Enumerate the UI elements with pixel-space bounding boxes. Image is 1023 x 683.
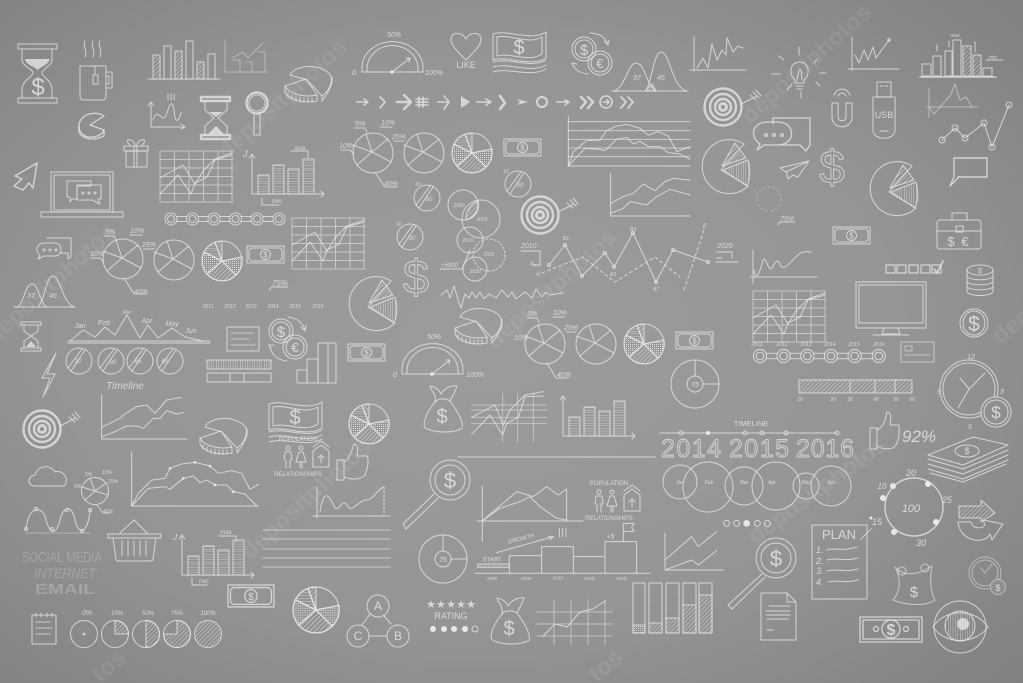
icon: speech bubbles xyxy=(753,118,810,151)
month circles xyxy=(663,462,851,512)
ruled lines xyxy=(263,530,390,567)
icon: banknote xyxy=(676,332,713,349)
icon: coin stack xyxy=(967,265,993,296)
pie big xyxy=(349,277,397,331)
icon: open money bag xyxy=(893,564,935,605)
watermark: depositphotos xyxy=(736,0,877,129)
year labels: 2013 xyxy=(244,304,257,310)
ring with values: 30 xyxy=(916,538,926,548)
growth steps: 2020 xyxy=(583,576,595,581)
icon: briefcase xyxy=(937,213,981,249)
icon: money bag xyxy=(424,386,462,432)
icon: light bulb xyxy=(772,47,826,98)
year labels: 2014 xyxy=(266,304,279,310)
donut chart xyxy=(671,360,719,408)
icon: timeline chain: 2013 xyxy=(799,342,812,348)
pie chart with labels: 25% xyxy=(141,242,156,249)
icon: dollar hourglass xyxy=(18,44,57,103)
month circles: May xyxy=(801,480,811,486)
wave chart xyxy=(750,250,817,283)
pie chart with labels: 25% xyxy=(391,134,406,141)
mini line chart xyxy=(690,37,746,71)
growth steps: GROWTH xyxy=(507,533,536,546)
icon: thumbs up xyxy=(337,444,368,480)
timeline label: Timeline xyxy=(106,381,144,392)
gauge xyxy=(393,334,484,379)
icon: monitor xyxy=(856,282,926,335)
gauge: 0 xyxy=(393,372,397,379)
pie chart with labels: 10% xyxy=(381,120,395,127)
bar chart with max and min: max xyxy=(220,530,233,536)
icon: like heart xyxy=(451,33,481,70)
gauge: 50% xyxy=(387,32,401,39)
progress bar xyxy=(797,380,915,403)
month circles: Mar xyxy=(740,480,749,486)
circles with values: 65 xyxy=(135,359,142,365)
small pie xyxy=(503,169,531,197)
arrows row xyxy=(357,95,633,109)
icon: gift xyxy=(124,140,148,167)
year labels: 2012 xyxy=(223,304,236,310)
pie chart with labels: 25% xyxy=(563,325,578,332)
icon: cloud xyxy=(29,467,66,486)
population pictogram xyxy=(274,437,329,478)
icon: coins exchange xyxy=(572,33,612,75)
area line chart xyxy=(132,452,258,506)
small pie chart: 40% xyxy=(103,509,114,515)
plan note: 2. xyxy=(815,556,824,566)
small pie chart: 25% xyxy=(107,479,119,485)
icon: dollar hourglass: $ xyxy=(31,74,45,101)
circles with values: 65 xyxy=(162,359,169,365)
outlined years: 2015 xyxy=(729,435,789,463)
icon: magnifier xyxy=(246,92,268,135)
stepped bars with arrows xyxy=(920,33,1003,77)
small pie: 10 xyxy=(415,182,421,188)
icon: 3d pie xyxy=(455,308,502,344)
faint social media text: INTERNET xyxy=(34,565,97,581)
gauge: 50% xyxy=(427,334,441,341)
pie chart with labels xyxy=(514,310,578,379)
venn diagram: 2005 xyxy=(475,217,488,223)
pie chart with labels: 10% xyxy=(130,228,144,235)
icon: banknote: $ xyxy=(887,622,896,639)
zigzag chart: B1 xyxy=(563,236,569,242)
icon: banknote xyxy=(833,227,870,244)
icon: clock with coin: $ xyxy=(991,403,1001,422)
icon: magnifier with dollar xyxy=(403,460,470,529)
line chart xyxy=(477,487,583,542)
icon: thumbs up xyxy=(870,412,899,449)
plan note: PLAN xyxy=(822,527,856,542)
month circles: Apr xyxy=(767,480,776,486)
venn diagram: +5000 xyxy=(441,263,459,269)
line chart on grid xyxy=(160,151,233,202)
line chart on grid xyxy=(753,291,826,342)
bar chart with max and min: min xyxy=(199,579,209,585)
growth steps: START xyxy=(483,558,502,564)
icon: timeline chain: 2015 xyxy=(847,342,860,348)
outlined years xyxy=(661,435,854,463)
icon: lightning xyxy=(42,353,56,397)
icon: like heart: LIKE xyxy=(456,60,476,70)
icon: target xyxy=(522,196,578,234)
stepped bars with arrows: max xyxy=(950,33,960,39)
timeline rule xyxy=(458,431,839,457)
mountain month chart: Apr xyxy=(141,318,153,325)
pie chart with labels: 5% xyxy=(527,311,537,318)
zigzag chart: F xyxy=(703,224,707,230)
zigzag chart: 2010 xyxy=(520,243,537,250)
curve chart xyxy=(148,94,185,129)
icon: document xyxy=(761,593,796,640)
hatched pie chart xyxy=(202,241,242,281)
icon: coins exchange xyxy=(269,317,307,361)
bell curve chart: 37 xyxy=(633,75,642,82)
icon: money bag xyxy=(491,598,529,644)
zigzag chart xyxy=(520,224,738,293)
icon: clock with coin: 3 xyxy=(1000,389,1004,396)
icon: magnifier with dollar xyxy=(728,538,796,609)
hatched pie chart xyxy=(349,404,389,444)
ABC cycle: C xyxy=(354,629,363,643)
pie chart with labels: 10% xyxy=(339,143,353,150)
timeline heading: TIMELINE xyxy=(734,419,768,428)
icon: coins exchange: € xyxy=(596,56,604,71)
icon: small hourglass xyxy=(21,322,41,351)
pie chart with labels: 5% xyxy=(105,229,115,236)
population pictogram xyxy=(585,481,640,522)
icon: dollar sign: $ xyxy=(819,141,845,193)
percentage circles: 100% xyxy=(200,611,216,617)
pie chart with labels: 40% xyxy=(384,181,398,188)
icon: briefcase: $ xyxy=(947,234,955,249)
zigzag chart: B4 xyxy=(630,227,636,233)
icon: banknote xyxy=(860,617,922,642)
growth steps: 2030 xyxy=(615,576,627,581)
zigzag chart: A xyxy=(535,272,540,278)
ring with values: 100 xyxy=(902,503,921,515)
venn diagram: 2000 xyxy=(452,203,465,209)
hatched pie chart xyxy=(452,133,492,173)
checkboxes xyxy=(886,261,943,273)
outlined years: 2014 xyxy=(661,435,721,463)
watermark: depositphotos xyxy=(743,431,892,550)
icon: banknote xyxy=(348,344,385,361)
wave chart xyxy=(24,508,92,533)
icon: dollar coin xyxy=(960,309,988,337)
line chart xyxy=(568,117,690,166)
bar chart with max and min: min xyxy=(272,199,282,205)
icon: arrow recycling xyxy=(958,500,1003,540)
pie chart with labels: 10% xyxy=(514,335,528,342)
bar chart with max and min: J xyxy=(242,149,248,159)
icon: pacman pie xyxy=(79,113,104,139)
percentage circles: 15% xyxy=(111,611,124,617)
icon: USB drive xyxy=(873,82,895,138)
icon: card note xyxy=(227,327,259,351)
faint social media text: EMAIL xyxy=(35,581,95,598)
line chart on grid xyxy=(537,600,612,645)
bar chart with max and min: J xyxy=(172,533,178,542)
pie big xyxy=(702,140,750,194)
circles with values: 10 xyxy=(75,359,82,365)
icon: target xyxy=(24,410,80,448)
icon: banknote xyxy=(504,139,541,156)
small pie: 10 xyxy=(503,169,509,175)
venn diagram: 2020 xyxy=(468,269,481,275)
line chart xyxy=(611,173,690,216)
rising trend chart xyxy=(665,520,770,570)
gauge: 0 xyxy=(352,70,356,77)
ABC cycle: A xyxy=(374,599,382,613)
ABC cycle xyxy=(347,595,409,647)
year labels: 2015 xyxy=(288,304,301,310)
icon: cursor xyxy=(14,163,37,190)
bell curve chart: 46 xyxy=(49,293,57,300)
icon: clock with coin xyxy=(937,354,1011,431)
icon: clock with coin: 12 xyxy=(967,354,975,361)
percentage: 92% xyxy=(902,427,936,446)
watermark: depositphotos xyxy=(236,434,377,564)
pie chart with labels: 10% xyxy=(90,251,104,258)
gauge: 100% xyxy=(466,372,484,379)
bell curve chart: 37 xyxy=(27,293,36,300)
faint dashed circle xyxy=(757,187,781,211)
small pie xyxy=(396,222,423,250)
icon: magnet xyxy=(832,89,852,127)
ring with values xyxy=(861,468,953,548)
pie chart with labels: 40% xyxy=(134,289,148,296)
growth steps xyxy=(475,523,650,581)
small pie xyxy=(414,182,440,211)
line chart on grid xyxy=(472,392,547,442)
pie big xyxy=(870,162,918,216)
percentage circles: 0% xyxy=(82,610,92,617)
icon: timeline chain: 2016 xyxy=(872,342,885,348)
percentage label: 75% xyxy=(272,279,288,288)
bar chart with max and min xyxy=(242,146,324,205)
rating xyxy=(426,599,478,632)
small pie: 90 xyxy=(409,236,416,242)
ABC cycle: B xyxy=(394,629,402,643)
icon: 3d pie xyxy=(285,66,332,102)
circles with values xyxy=(66,348,183,374)
icon: eye xyxy=(933,601,988,653)
icon: clipboard xyxy=(32,613,56,644)
pulse chart xyxy=(441,286,563,308)
mountain month chart: Mar xyxy=(123,310,132,316)
mountain month chart: May xyxy=(165,321,179,328)
icon: cash stack xyxy=(928,437,1008,482)
zigzag chart: B3 xyxy=(610,272,616,278)
venn diagram: 2010 xyxy=(461,238,474,244)
faint social media text: SOCIAL MEDIA xyxy=(22,549,102,566)
icon: clock with coin: 6 xyxy=(968,424,972,431)
zigzag chart: 2020 xyxy=(716,243,733,250)
hatched pie chart xyxy=(293,587,339,633)
icon: dollar coin: $ xyxy=(968,313,980,336)
progress bar: 10 xyxy=(797,397,803,403)
plan note: 3. xyxy=(816,566,824,576)
year labels: 2016 xyxy=(311,304,324,310)
icon: coins exchange: $ xyxy=(580,42,589,59)
step bar chart xyxy=(297,343,336,383)
month circles: Jan xyxy=(675,480,684,486)
icon: open money bag: $ xyxy=(910,584,919,601)
percentage label xyxy=(269,279,288,290)
mountain month chart: Jun xyxy=(184,328,197,335)
icon: USB drive: USB xyxy=(875,110,893,120)
percentage circles: 50% xyxy=(142,611,155,617)
zigzag chart: B7 xyxy=(653,287,659,293)
mountain month chart: Jan xyxy=(73,323,86,330)
venn diagram xyxy=(440,190,505,281)
icon: wavy banknote xyxy=(493,32,546,73)
progress bar: 50 xyxy=(893,397,899,403)
mini rising chart xyxy=(848,37,899,70)
ring with values: 10 xyxy=(878,482,887,491)
icon: laptop chat xyxy=(41,172,123,217)
percentage label: 75% xyxy=(780,216,794,223)
small pie: 90 xyxy=(517,183,524,189)
circles with values: 90 xyxy=(110,360,117,366)
donut chart xyxy=(419,535,467,583)
plan note xyxy=(812,525,867,599)
faint mountain chart xyxy=(927,84,978,117)
icon: timeline chain: 2014 xyxy=(823,342,836,348)
bar chart xyxy=(148,41,220,79)
year labels xyxy=(202,304,324,310)
small pie chart: 5% xyxy=(74,484,82,490)
icon: speech bubbles xyxy=(37,238,71,259)
line chart xyxy=(102,395,187,439)
gauge: 100% xyxy=(425,70,443,77)
pie chart xyxy=(154,240,194,280)
bell curve chart: 46 xyxy=(657,75,665,82)
bar chart with max and min: max xyxy=(294,146,307,152)
gauge xyxy=(352,32,443,77)
pie chart with labels: 40% xyxy=(557,372,571,379)
month circles: Jun xyxy=(826,480,835,486)
pie chart with labels xyxy=(90,228,156,296)
icon: target xyxy=(704,88,761,126)
brick bars xyxy=(207,360,271,382)
faint bar chart xyxy=(225,40,268,72)
small pie chart: 5% xyxy=(85,472,93,478)
percentage circles xyxy=(70,610,222,648)
mountain month chart: Feb xyxy=(98,320,110,327)
percentage circles: 75% xyxy=(171,611,184,617)
icon: clock with coin: 9 xyxy=(937,389,941,396)
rating: ★★★★★ xyxy=(426,599,476,611)
plan note: 1. xyxy=(816,545,824,555)
stacked level bars xyxy=(633,583,712,633)
icon: cash stack: $ xyxy=(964,446,970,456)
growth steps: +$ xyxy=(607,533,615,540)
stepped bars with arrows: min xyxy=(989,55,997,61)
icon: timeline chain: 2012 xyxy=(775,342,788,348)
watermark: depositphotos xyxy=(212,34,353,164)
icon: banknote xyxy=(247,246,284,263)
icon: tea mug xyxy=(80,41,112,100)
year labels: 2011 xyxy=(202,304,214,310)
icon: coins exchange: € xyxy=(291,340,299,355)
hatched pie chart xyxy=(624,324,664,364)
venn diagram: 2015 xyxy=(482,252,495,258)
bar chart xyxy=(560,396,635,439)
icon: banknote xyxy=(228,585,274,607)
mountain month chart xyxy=(68,310,210,343)
bell curve chart xyxy=(14,276,75,307)
bar chart with max and min xyxy=(172,530,254,585)
small pie: 90 xyxy=(426,197,433,203)
icon: timeline chain xyxy=(751,342,885,363)
outlined years: 2016 xyxy=(796,435,854,463)
plan note: 4. xyxy=(816,577,824,587)
growth steps: 2010 xyxy=(552,575,563,580)
icon: hourglass xyxy=(201,97,230,139)
progress bar: 30 xyxy=(847,397,853,403)
icon: wavy banknote xyxy=(269,402,322,443)
icon: paper plane xyxy=(780,161,809,179)
icon: credit card xyxy=(901,342,934,362)
icon: coins exchange: $ xyxy=(277,324,286,341)
progress bar: 60 xyxy=(909,397,915,403)
progress bar: 20 xyxy=(829,397,836,403)
icon: 3d pie xyxy=(200,418,247,454)
growth steps: 1990 xyxy=(487,576,497,581)
growth steps: 2000 xyxy=(520,576,532,581)
ring with values: 15 xyxy=(872,517,883,527)
icon: faint clock xyxy=(969,557,1006,594)
icon: briefcase: € xyxy=(961,234,969,249)
small pie: 10 xyxy=(396,222,402,228)
pie chart with labels: 10% xyxy=(553,310,567,317)
bell curve chart xyxy=(612,52,688,91)
icon: speech bubble xyxy=(950,158,987,186)
icon: timeline chain xyxy=(165,213,285,225)
watermark: depositphotos xyxy=(481,224,622,354)
percentage label xyxy=(778,216,795,225)
pie chart xyxy=(576,324,616,364)
wave chart xyxy=(313,487,390,518)
rising line chart xyxy=(939,102,1012,150)
ring with values: 20 xyxy=(905,468,916,478)
pie chart xyxy=(404,133,444,173)
small pie chart: 10% xyxy=(102,470,113,476)
small pie chart xyxy=(74,470,119,515)
icon: dollar sign: $ xyxy=(403,250,429,303)
ring with values: 25 xyxy=(941,495,953,505)
rating: RATING xyxy=(434,611,468,621)
progress bar: 40 xyxy=(873,397,879,403)
icon: timeline chain: 2011 xyxy=(751,342,763,348)
month circles: Feb xyxy=(705,480,714,486)
icon: basket xyxy=(108,520,161,561)
icon: coin stack: $ xyxy=(978,268,982,275)
icon: faint clock: $ xyxy=(995,583,1001,593)
faint social media text xyxy=(22,549,102,598)
pie chart with labels xyxy=(339,120,406,188)
line chart on grid xyxy=(292,218,365,269)
pie chart with labels: 5% xyxy=(355,121,365,128)
